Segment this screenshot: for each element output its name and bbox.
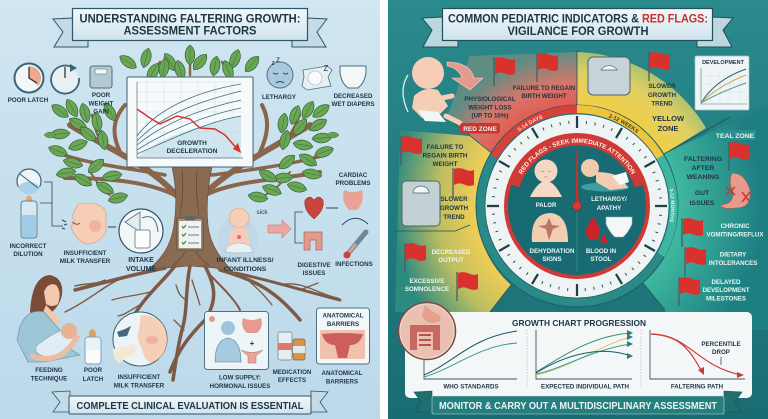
label: poor latch: POOR [84,367,103,374]
label: infant illness conditions: CONDITIONS [224,266,267,273]
label: blood in stool: BLOOD IN [586,248,617,255]
label: dietary intolerances: DIETARY [720,252,747,258]
icon: scale [588,57,630,95]
icon: diaper [606,217,632,237]
panel: low supply hormonal issues [204,312,268,370]
label: feeding technique [31,367,67,382]
zone: teal [643,105,768,330]
arrow: heart to thyroid [326,207,338,209]
arrow: illness to conditions [268,220,291,238]
label: delayed development milestones [702,279,750,302]
label: red zone [460,123,500,134]
label: excessive somnolence [405,278,449,293]
label: slower growth trend: SLOWER [648,83,676,90]
chart: faltering path: DROP [712,349,730,356]
tree branches [55,60,325,198]
label: decreased output [432,249,471,264]
label: insufficient milk transfer [60,250,111,265]
label: poor latch [83,367,104,383]
label: chronic vomiting reflux: CHRONIC [721,223,750,230]
chart: faltering path: FALTERING PATH [671,384,724,390]
icon: dehydration head [532,213,568,242]
label: blood in stool: STOOL [590,256,612,263]
icon: loss arrow [447,62,483,90]
label: decreased wet diapers: DECREASED [334,93,373,100]
title banner: COMMON PEDIATRIC INDICATORS & RED FLAGS: [448,14,708,26]
label: insufficient milk transfer: MILK TRANSFER [114,382,165,390]
label: cardiac problems [335,172,371,187]
icon: thyroid [343,190,363,210]
icon: blood drops [586,217,607,244]
label: decreased output: DECREASED [432,249,471,256]
icon: diaper [340,66,366,88]
icon: red flag [679,277,700,306]
panel: anatomical barriers [316,308,370,364]
icon: red flag [685,247,706,276]
dial outer ring [476,105,678,307]
red flags arc banner: RED FLAGS - SEEK IMMEDIATE ATTENTION [518,138,636,174]
label: failure to regain birth weight [513,85,576,100]
panel: anatomical barriers: BARRIERS [327,321,359,328]
icon: baby face feeding [62,203,106,244]
label: blood in stool [586,248,617,263]
clipboard [177,216,203,250]
label: decreased wet diapers [332,93,374,108]
label: faltering after weaning: FALTERING [684,156,722,163]
label: incorrect dilution: DILUTION [13,251,43,258]
panel: development chart: DEVELOPMENT [702,60,745,66]
panel: common pediatric indicators [388,0,768,419]
label: lethargy: LETHARGY [262,94,297,101]
label: digestive issues: DIGESTIVE [297,262,331,269]
label: faltering after weaning: AFTER [692,165,714,172]
icon: sleeping baby [581,159,629,192]
bracket [295,212,303,243]
connector arrow: to pump [108,226,116,228]
label: medication effects: MEDICATION [273,369,312,376]
label: faltering after weaning [684,156,722,181]
label: failure to regain birth weight [423,144,468,168]
band: 2-12 weeks: 2-12 WEEKS [608,114,639,133]
icon: palor baby [530,160,562,197]
title banner: VIGILANCE FOR GROWTH [508,26,648,38]
title banner: ASSESSMENT FACTORS [124,26,257,38]
connector arrows: dilution [40,182,63,226]
icon: sick infant: sick [256,209,268,216]
label: low supply hormonal issues: HORMONAL ISSUES [210,383,270,390]
dial inner ring [506,135,648,277]
growth chart card [127,77,253,167]
chart: expected individual path: EXPECTED INDIVIDUAL PATH [541,384,630,390]
band: 3-12 months: 3-12 MONTHS [670,188,675,222]
panel: growth chart progression [398,302,752,398]
label: physiological weight loss: (UP TO 10%) [472,112,508,120]
icon: stomach with cross [720,173,750,209]
dial white ring [485,114,669,298]
icon: bottle [85,329,101,364]
icon: sick infant [218,208,268,264]
icon: heart [305,197,323,219]
tree roots [65,266,340,380]
label: chronic vomiting reflux: VOMITING/REFLUX [706,232,764,238]
label: gut issues: GUT [695,190,710,197]
label: lethargy apathy: LETHARGY/ [591,196,627,203]
label: intake volume [126,257,156,273]
footer banner [414,391,742,414]
label: lethargy apathy [591,196,627,212]
label: poor weight gain: WEIGHT [89,100,114,108]
icon: red flag [453,168,474,197]
icon: lethargy face: z [276,55,280,64]
label: delayed development milestones: MILESTONES [706,296,746,302]
label: palor: PALOR [536,203,557,209]
panel: understanding faltering growth [0,0,380,419]
icon: lethargy face: z [271,60,275,67]
chart: faltering path [650,330,745,390]
footer banner: MONITOR & CARRY OUT A MULTIDISCIPLINARY ASSESSMENT [439,400,718,412]
zone: left yellow [395,130,511,312]
icon: red flag [729,142,750,171]
label: medication effects: EFFECTS [278,377,306,384]
title banner [422,8,733,47]
label: faltering after weaning: WEANING [687,174,719,181]
icon: red flag [457,272,478,301]
title: growth chart progression: GROWTH CHART PROGRESSION [512,318,646,328]
chart: expected individual path [536,330,633,390]
zone: yellow [577,52,706,155]
label: slower growth trend: TREND [651,100,673,108]
icon: clock [14,64,44,92]
icon: breast pump [119,209,163,253]
icon: red flag [494,57,515,86]
label: delayed development milestones: DELAYED [712,279,741,286]
icon: red flag [405,243,426,272]
chart: who standards [424,331,517,390]
label: dietary intolerances [709,252,757,267]
label: slower growth trend: TREND [443,214,465,221]
trunk bark lines [172,170,210,266]
label: low supply hormonal issues [210,374,270,390]
label: teal zone: TEAL ZONE [716,133,755,140]
needle [572,150,582,210]
chart: who standards: WHO STANDARDS [443,384,499,390]
label: red zone: RED ZONE [463,126,497,133]
growth chart card: DECELERATION [167,148,218,155]
label: infections: INFECTIONS [335,261,373,268]
label: decreased wet diapers: WET DIAPERS [332,101,374,108]
icon: intestine circle [398,302,456,360]
label: poor weight gain [89,92,114,116]
red flags arc banner [512,137,642,188]
label: intake volume: VOLUME [126,266,156,273]
label: cardiac problems: CARDIAC [339,172,368,179]
label: dehydration signs: SIGNS [542,256,562,263]
icon: red flag [537,53,558,82]
label: dehydration signs: DEHYDRATION [530,248,575,255]
zone divider lines [394,50,730,312]
band: 2-12 weeks [576,105,664,159]
label: lethargy apathy: APATHY [597,205,622,212]
label: infant illness conditions: INFANT ILLNESS/ [216,257,274,264]
icon: pillow [302,64,332,90]
label: decreased output: OUTPUT [438,257,464,264]
label: yellow zone [652,114,685,133]
icon: baby bottle [21,196,37,238]
label: failure to regain birth weight: REGAIN BIRTH [423,152,468,160]
tree leaves [44,45,339,205]
icon: scale [402,181,440,226]
icon: baby on scale [403,57,460,123]
label: failure to regain birth weight: FAILURE TO REGAIN [513,85,576,92]
label: poor weight gain: POOR [92,92,111,99]
label: feeding technique: FEEDING [35,367,63,374]
label: medication effects [273,369,312,384]
label: slower growth trend: GROWTH [440,205,469,212]
label: digestive issues [297,262,331,277]
label: anatomical barriers: BARRIERS [326,378,358,386]
icon: baby latching circle [113,312,167,366]
icon: weight scale [90,66,112,88]
label: anatomical barriers [321,370,363,386]
dial [476,104,678,308]
label: chronic vomiting reflux [706,223,764,238]
footer banner: COMPLETE CLINICAL EVALUATION IS ESSENTIAL [76,400,304,412]
tree [44,45,340,380]
icon: pillow: Z [324,64,329,73]
label: failure to regain birth weight: WEIGHT [433,161,458,168]
icon: digestive [304,232,322,250]
icon: red flag [649,52,670,81]
title banner [53,8,327,47]
red falling line [137,109,239,151]
footer banner [52,391,328,414]
label: insufficient milk transfer: MILK TRANSFER [60,258,111,265]
label: cardiac problems: PROBLEMS [335,180,371,187]
label: failure to regain birth weight: BIRTH WEIGHT [521,93,567,100]
label: poor latch: LATCH [83,376,104,383]
label: excessive somnolence: SOMNOLENCE [405,286,449,293]
icon: curved arrow [342,218,368,225]
label: anatomical barriers: ANATOMICAL [321,370,363,377]
label: physiological weight loss: PHYSIOLOGICAL [464,96,516,103]
label: poor weight gain: GAIN [93,108,109,116]
label: failure to regain birth weight: FAILURE TO [427,144,464,151]
label: excessive somnolence: EXCESSIVE [409,278,445,285]
icon: incorrect dilution [17,169,41,194]
label: dietary intolerances: INTOLERANCES [709,260,757,267]
tree trunk [148,167,235,274]
zone: red [447,52,577,155]
label: incorrect dilution: INCORRECT [10,243,47,250]
label: yellow zone: ZONE [658,124,678,133]
panel: anatomical barriers: ANATOMICAL [322,312,364,320]
label: low supply hormonal issues: LOW SUPPLY: [219,374,261,382]
band: 3-12 months [656,155,678,257]
label: insufficient milk transfer: INSUFFICIENT [118,374,161,381]
growth chart card: GROWTH [177,140,207,147]
label: teal zone [714,130,756,140]
band: 0-14 days [490,105,577,159]
label: feeding technique: TECHNIQUE [31,376,67,382]
icon: red flag [682,218,703,247]
label: insufficient milk transfer: INSUFFICIENT [64,250,107,257]
icon: mother feeding baby [17,275,80,362]
label: physiological weight loss: WEIGHT LOSS [468,104,512,112]
icon: thermometer [344,232,366,258]
label: dehydration signs [530,248,575,263]
icon: lethargy face [267,55,293,88]
label: slower growth trend [648,83,677,108]
icon: red flag [401,136,422,165]
label: digestive issues: ISSUES [303,270,325,277]
inner dividers [576,212,578,272]
icon: medication bottles [278,332,305,360]
label: poor latch: POOR LATCH [8,97,49,104]
label: slower growth trend: SLOWER [440,196,468,203]
label: insufficient milk transfer [114,374,165,390]
label: intake volume: INTAKE [128,257,154,264]
band: 0-14 days: 0-14 DAYS [518,115,542,132]
title banner: UNDERSTANDING FALTERING GROWTH: [80,14,300,26]
label: incorrect dilution [10,243,47,258]
label: slower growth trend: GROWTH [648,92,677,99]
icon: timer [51,64,79,94]
label: infant illness conditions [216,257,274,273]
label: slower growth trend [440,196,469,221]
chart: faltering path: PERCENTILE [701,341,741,348]
label: physiological weight loss [464,96,516,120]
panel: low supply hormonal issues: + [250,339,255,348]
panel: development chart [695,56,749,110]
label: delayed development milestones: DEVELOPMENT [702,287,750,294]
label: gut issues [690,190,715,207]
label: gut issues: ISSUES [690,200,715,207]
label: yellow zone: YELLOW [652,114,685,123]
